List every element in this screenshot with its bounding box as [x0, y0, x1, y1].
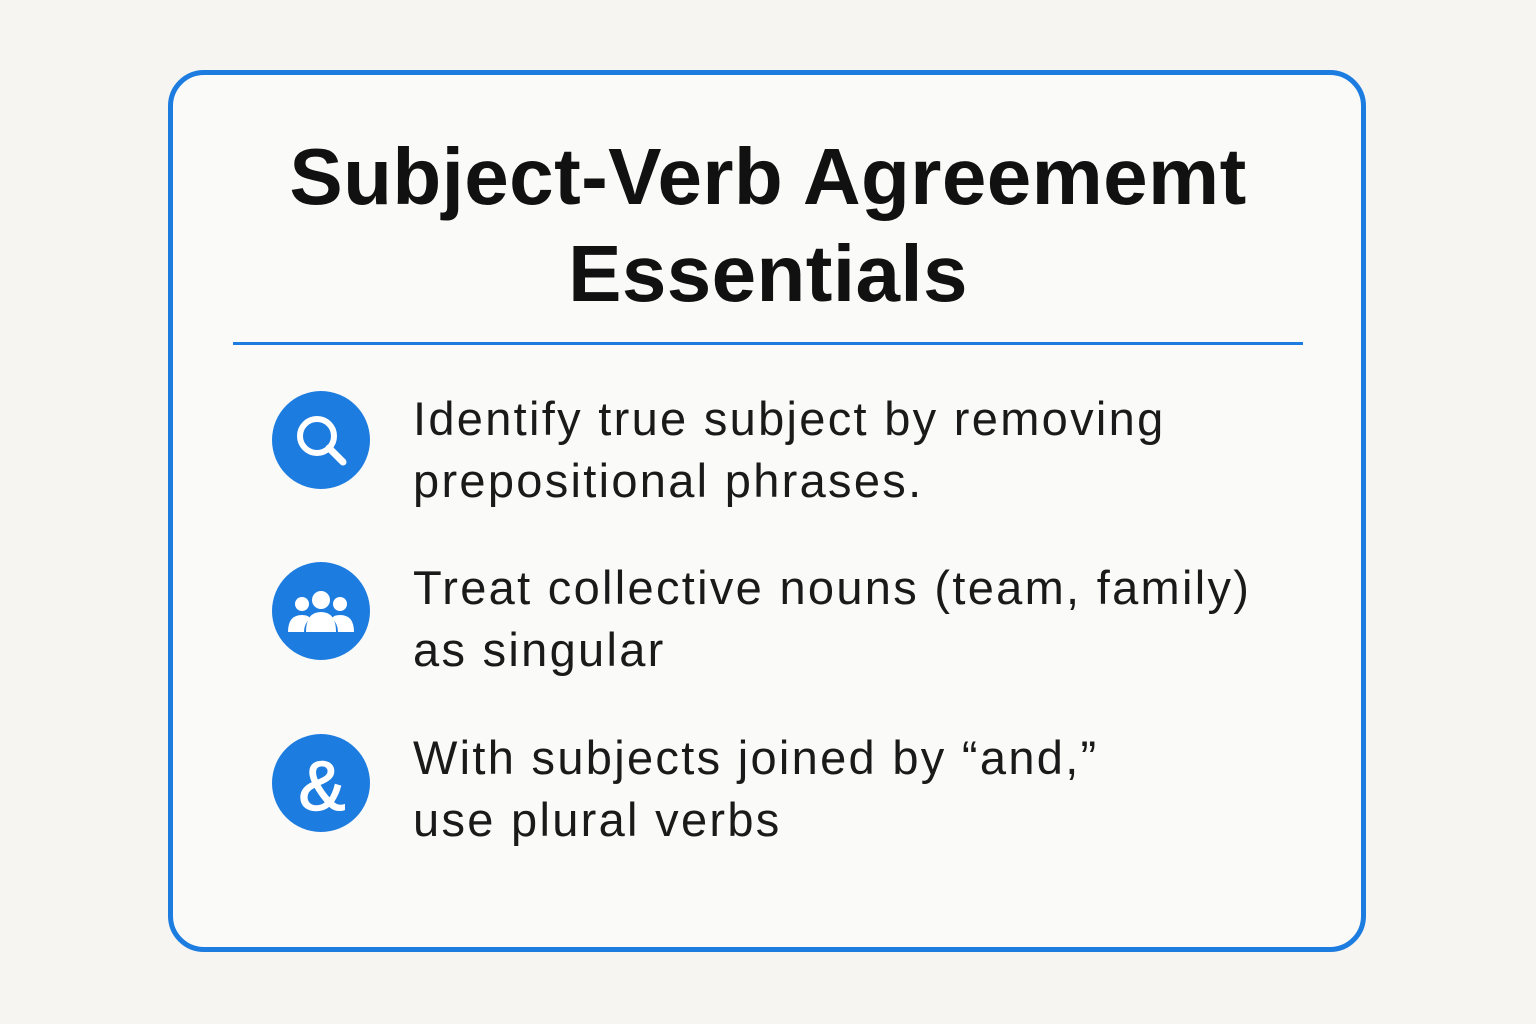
icon: group of people	[272, 562, 370, 660]
text: item 2: as singular	[413, 623, 666, 676]
text: item 1: prepositional phrases.	[413, 454, 923, 507]
icon: ampersand: &	[299, 747, 345, 825]
text: item 3: use plural verbs	[413, 793, 782, 846]
text: item 3: With subjects joined by “and,”	[413, 731, 1099, 784]
text: item 2: Treat collective nouns (team, family)	[413, 561, 1251, 614]
icon: ampersand	[272, 734, 370, 832]
text: item 3	[413, 731, 1099, 846]
card panel	[168, 70, 1366, 952]
text: item 1	[413, 392, 1166, 507]
title: Subject-Verb Agreememt	[289, 132, 1247, 221]
text: item 1: Identify true subject by removing	[413, 392, 1166, 445]
title: Essentials	[568, 229, 968, 318]
text: item 2	[413, 561, 1251, 676]
icon: magnifying glass	[272, 391, 370, 489]
title	[289, 132, 1247, 318]
